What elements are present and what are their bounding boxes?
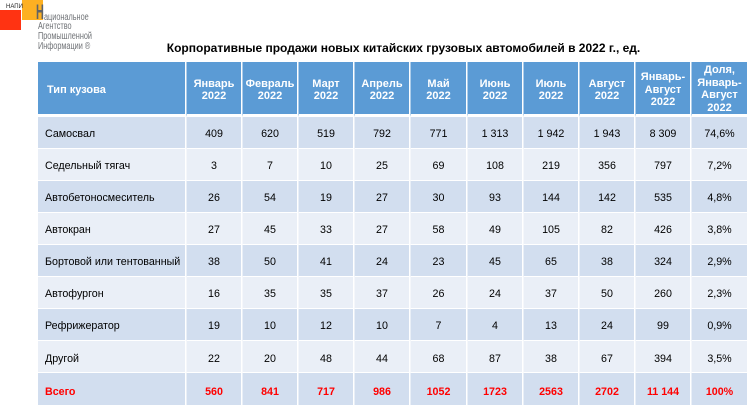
- row: Рефрижератор: [38, 309, 747, 341]
- row: Всего: 717: [317, 386, 335, 398]
- row: Автобетоносмеситель: 93: [489, 192, 501, 204]
- row: Другой: [38, 341, 747, 372]
- row: Автобетоносмеситель: 27: [376, 192, 388, 204]
- row: Автобетоносмеситель: 54: [264, 192, 276, 204]
- row: Всего: Всего: [45, 386, 75, 398]
- row: Всего: 2702: [595, 386, 619, 398]
- table header row: Август: [645, 84, 681, 96]
- row: Седельный тягач: 69: [433, 160, 444, 172]
- row: Всего: 2563: [539, 386, 563, 398]
- row: Автокран: 27: [376, 224, 388, 236]
- row: Автобетоносмеситель: Автобетоносмеситель: [45, 192, 155, 204]
- row: Другой: 48: [320, 353, 332, 365]
- row: Автобетоносмеситель: 142: [598, 192, 616, 204]
- row: Бортовой или тентованный: 2,9%: [707, 256, 732, 268]
- row: Автофургон: 24: [489, 288, 501, 300]
- row: Автофургон: 2,3%: [707, 288, 732, 300]
- table header row: Июль: [536, 78, 566, 90]
- row: Другой: 87: [489, 353, 501, 365]
- row: Рефрижератор: 10: [264, 320, 276, 332]
- row: Самосвал: [38, 117, 747, 149]
- logo name line 4: Информации ®: [38, 41, 90, 52]
- row: Всего: 1052: [427, 386, 450, 398]
- row: Другой: 20: [264, 353, 276, 365]
- table header row: [38, 62, 747, 405]
- row: Автофургон: 37: [376, 288, 388, 300]
- row: Всего: 841: [261, 386, 279, 398]
- logo name line 2: Агентство: [38, 21, 72, 32]
- row: Рефрижератор: 7: [436, 320, 441, 332]
- row: Седельный тягач: 108: [486, 160, 504, 172]
- table header row: 2022: [370, 90, 394, 102]
- row: Другой: 394: [654, 353, 672, 365]
- table header row: Доля,: [704, 64, 735, 76]
- row: Автокран: 105: [542, 224, 560, 236]
- row: Автокран: 3,8%: [707, 224, 732, 236]
- row: Бортовой или тентованный: 23: [433, 256, 444, 268]
- row: Самосвал: 8 309: [650, 128, 676, 140]
- row: Автофургон: 37: [545, 288, 557, 300]
- row: Всего: 11 144: [647, 386, 679, 398]
- table header row: Январь: [194, 78, 234, 90]
- logo: НАПИ: [0, 0, 92, 52]
- row: Седельный тягач: Седельный тягач: [45, 160, 130, 172]
- row: Самосвал: 519: [317, 128, 335, 140]
- row: Рефрижератор: 24: [601, 320, 613, 332]
- table header row: 2022: [707, 102, 732, 114]
- table header row: Апрель: [361, 78, 403, 90]
- row: Бортовой или тентованный: 24: [376, 256, 388, 268]
- table header row: 2022: [426, 90, 451, 102]
- row: Автобетоносмеситель: 4,8%: [707, 192, 732, 204]
- row: Всего: [38, 373, 747, 405]
- table header row: 2022: [483, 90, 507, 102]
- row: Автокран: 33: [320, 224, 332, 236]
- row: Другой: 68: [433, 353, 444, 365]
- row: Бортовой или тентованный: 38: [208, 256, 220, 268]
- row: Самосвал: 1 943: [594, 128, 620, 140]
- table header row: Январь-: [697, 76, 742, 88]
- row: Всего: 560: [205, 386, 223, 398]
- row: Автофургон: 35: [264, 288, 276, 300]
- row: Рефрижератор: 99: [657, 320, 669, 332]
- table header row: 2022: [539, 90, 563, 102]
- row: Бортовой или тентованный: [38, 245, 747, 277]
- row: Седельный тягач: 7: [267, 160, 273, 172]
- row: Автофургон: 260: [654, 288, 672, 300]
- row: Седельный тягач: 10: [320, 160, 332, 172]
- row: Седельный тягач: 356: [598, 160, 616, 172]
- row: Другой: 44: [376, 353, 388, 365]
- row: Другой: Другой: [45, 353, 79, 365]
- row: Автокран: 45: [264, 224, 276, 236]
- row: Бортовой или тентованный: 324: [654, 256, 672, 268]
- row: Автокран: 426: [654, 224, 672, 236]
- logo large letter: Н: [36, 1, 44, 24]
- row: Автокран: [38, 213, 747, 244]
- logo small caption: НАПИ: [6, 4, 23, 10]
- row: Самосвал: 1 313: [482, 128, 508, 140]
- row: Другой: 22: [208, 353, 220, 365]
- row: Самосвал: 74,6%: [704, 128, 735, 140]
- row: Рефрижератор: 19: [208, 320, 220, 332]
- row: Другой: 67: [601, 353, 613, 365]
- data table: corporate sales by body type: [38, 62, 747, 405]
- row: Седельный тягач: 7,2%: [707, 160, 732, 172]
- row: Бортовой или тентованный: 50: [264, 256, 276, 268]
- row: Рефрижератор: Рефрижератор: [45, 320, 120, 332]
- row: Рефрижератор: 4: [492, 320, 498, 332]
- row: Рефрижератор: 10: [376, 320, 388, 332]
- logo name line 1: ациональное: [44, 12, 89, 23]
- row: Самосвал: Самосвал: [45, 128, 95, 140]
- row: Седельный тягач: [38, 149, 747, 180]
- table header row: Август: [589, 78, 625, 90]
- logo orange square: [22, 0, 43, 20]
- row: Автобетоносмеситель: 30: [433, 192, 444, 204]
- title: Корпоративные продажи новых китайских грузовых автомобилей в 2022 г., ед.: [167, 41, 640, 55]
- row: Самосвал: 620: [261, 128, 279, 140]
- row: Рефрижератор: 13: [545, 320, 557, 332]
- row: Автофургон: [38, 277, 747, 308]
- table header row: Январь-: [641, 71, 685, 83]
- row: Автокран: 58: [433, 224, 444, 236]
- row: Автокран: Автокран: [45, 224, 91, 236]
- table header row: 2022: [202, 90, 226, 102]
- row: Седельный тягач: 219: [542, 160, 560, 172]
- row: Самосвал: 771: [430, 128, 447, 140]
- row: Самосвал: 792: [373, 128, 391, 140]
- row: Автобетоносмеситель: 535: [654, 192, 672, 204]
- row: Другой: 3,5%: [707, 353, 732, 365]
- row: Автобетоносмеситель: 19: [320, 192, 332, 204]
- logo name line 3: Промышленной: [38, 31, 92, 42]
- row: Всего: 986: [373, 386, 391, 398]
- row: Седельный тягач: 797: [654, 160, 672, 172]
- table header row: Февраль: [246, 78, 294, 90]
- row: Самосвал: 409: [205, 128, 223, 140]
- table header row: Март: [312, 78, 340, 90]
- table header row: Август: [701, 89, 738, 101]
- row: Бортовой или тентованный: 38: [601, 256, 613, 268]
- row: Бортовой или тентованный: 45: [489, 256, 501, 268]
- table header row: 2022: [651, 96, 675, 108]
- row: Автофургон: 26: [433, 288, 444, 300]
- row: Седельный тягач: 3: [211, 160, 217, 172]
- row: Автофургон: 16: [208, 288, 220, 300]
- row: Автокран: 82: [601, 224, 613, 236]
- row: Седельный тягач: 25: [376, 160, 388, 172]
- row: Автофургон: 35: [320, 288, 332, 300]
- row: Бортовой или тентованный: Бортовой или тентованный: [45, 256, 180, 268]
- row: Рефрижератор: 12: [320, 320, 332, 332]
- table header row: 2022: [314, 90, 338, 102]
- row: Автобетоносмеситель: 26: [208, 192, 220, 204]
- row: Автофургон: Автофургон: [45, 288, 104, 300]
- row: Самосвал: 1 942: [538, 128, 564, 140]
- logo red square: [0, 10, 21, 30]
- row: Всего: 100%: [706, 386, 733, 398]
- row: Другой: 38: [545, 353, 557, 365]
- row: Автокран: 49: [489, 224, 501, 236]
- table header row: 2022: [258, 90, 282, 102]
- table header row: Тип кузова: [47, 84, 106, 96]
- row: Автокран: 27: [208, 224, 220, 236]
- row: Бортовой или тентованный: 41: [320, 256, 332, 268]
- row: Автобетоносмеситель: 144: [542, 192, 560, 204]
- table header row: Май: [427, 78, 450, 90]
- table header row: Июнь: [480, 78, 510, 90]
- table header row: 2022: [595, 90, 619, 102]
- row: Всего: 1723: [483, 386, 507, 398]
- row: Автобетоносмеситель: [38, 181, 747, 213]
- row: Рефрижератор: 0,9%: [707, 320, 732, 332]
- row: Бортовой или тентованный: 65: [545, 256, 557, 268]
- row: Автофургон: 50: [601, 288, 613, 300]
